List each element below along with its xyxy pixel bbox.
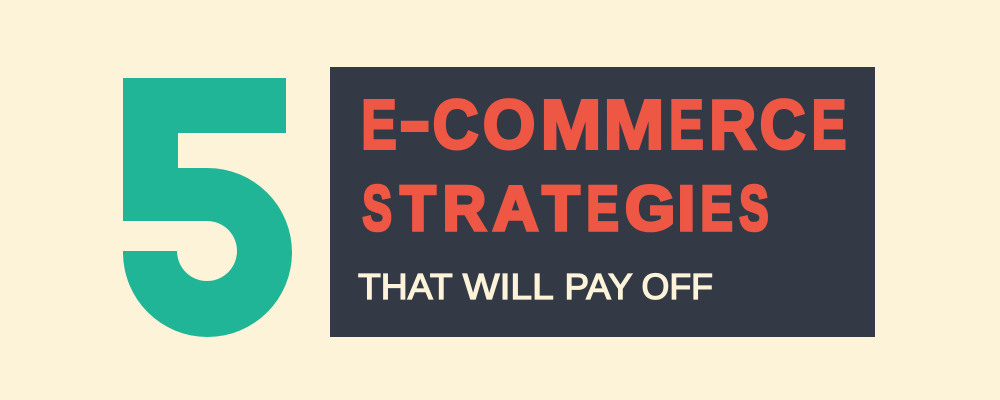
panel: title background <box>330 67 875 337</box>
heading: E-COMMERCE: O <box>483 86 535 164</box>
heading: E-COMMERCE: - <box>399 82 430 160</box>
heading: STRATEGIES: E <box>700 174 733 244</box>
large numeral 5 <box>123 78 292 337</box>
heading: E-COMMERCE: E <box>361 86 397 164</box>
heading: E-COMMERCE: C <box>760 86 806 164</box>
heading: STRATEGIES: E <box>586 174 619 244</box>
subtitle: OFF <box>642 266 713 307</box>
heading: STRATEGIES: T <box>400 174 436 244</box>
heading: E-COMMERCE: C <box>433 86 479 164</box>
heading: STRATEGIES: T <box>542 174 580 244</box>
subtitle: PAY <box>564 266 633 307</box>
heading: STRATEGIES: R <box>443 174 486 244</box>
heading: STRATEGIES: A <box>493 174 538 244</box>
heading: STRATEGIES: I <box>678 174 695 244</box>
heading: STRATEGIES: G <box>625 174 675 244</box>
subtitle: THAT <box>358 266 453 307</box>
heading: E-COMMERCE: M <box>604 86 664 164</box>
heading: E-COMMERCE: R <box>709 86 756 164</box>
heading: E-COMMERCE: M <box>541 86 601 164</box>
subtitle: WILL <box>463 266 553 307</box>
heading: E-COMMERCE: E <box>669 86 704 164</box>
heading: STRATEGIES: S <box>362 174 392 244</box>
heading: STRATEGIES: S <box>739 174 768 244</box>
heading: E-COMMERCE: E <box>812 86 846 164</box>
